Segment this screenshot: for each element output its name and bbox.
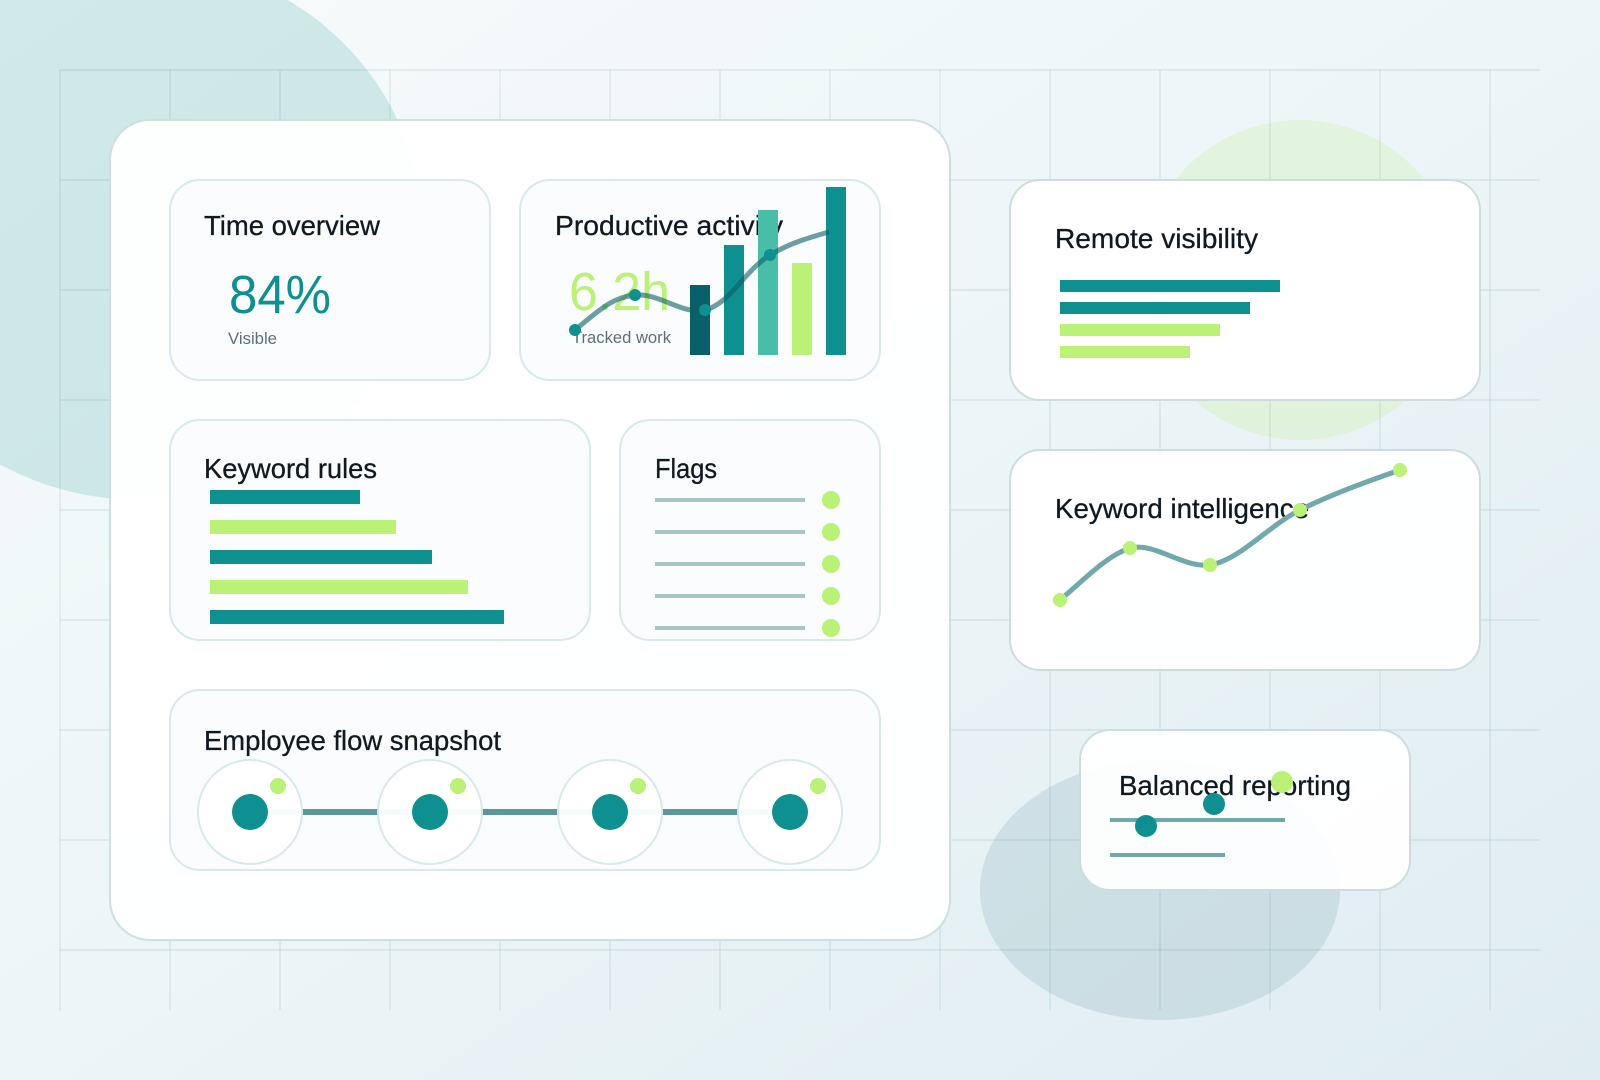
slider chart: balance: [1110, 771, 1293, 857]
background blob: teal top-left: [0, 0, 422, 500]
bar chart: activity: [690, 187, 846, 355]
panel: keyword intelligence: [1010, 450, 1480, 670]
label: tracked work: Tracked work: [572, 328, 671, 347]
background blob: slate lower right: [980, 760, 1340, 1020]
heading: keyword rules: Keyword rules: [204, 453, 377, 484]
panel: time overview: [170, 180, 490, 380]
line chart: keyword trend: [1053, 463, 1407, 607]
heading: employee flow snapshot: Employee flow snapshot: [204, 725, 501, 756]
label: visible: Visible: [228, 329, 277, 348]
heading: productive activity: Productive activity: [555, 210, 783, 241]
heading: keyword intelligence: Keyword intelligence: [1055, 493, 1309, 524]
panel: productive activity: [520, 180, 880, 380]
heading: time overview: Time overview: [204, 210, 381, 241]
stat: 6.2h: 6.2h: [569, 262, 670, 322]
bar chart: keyword rules: [210, 490, 504, 624]
list: flag rows: [655, 491, 840, 637]
panel: flags: [620, 420, 880, 640]
line chart: activity trend: [569, 232, 829, 336]
panel: keyword rules: [170, 420, 590, 640]
panel: remote visibility: [1010, 180, 1480, 400]
heading: flags: Flags: [655, 453, 717, 484]
flow nodes: [198, 760, 842, 864]
panel: main dashboard: [110, 120, 950, 940]
connector: flow line: [250, 809, 790, 815]
background blob: lime right: [1140, 120, 1460, 440]
heading: remote visibility: Remote visibility: [1055, 223, 1258, 254]
panel: balanced reporting: [1080, 730, 1410, 890]
bar chart: remote visibility: [1060, 280, 1280, 358]
stat: 84 percent: 84%: [229, 265, 331, 325]
panel: employee flow snapshot: [170, 690, 880, 870]
heading: balanced reporting: Balanced reporting: [1119, 770, 1351, 801]
